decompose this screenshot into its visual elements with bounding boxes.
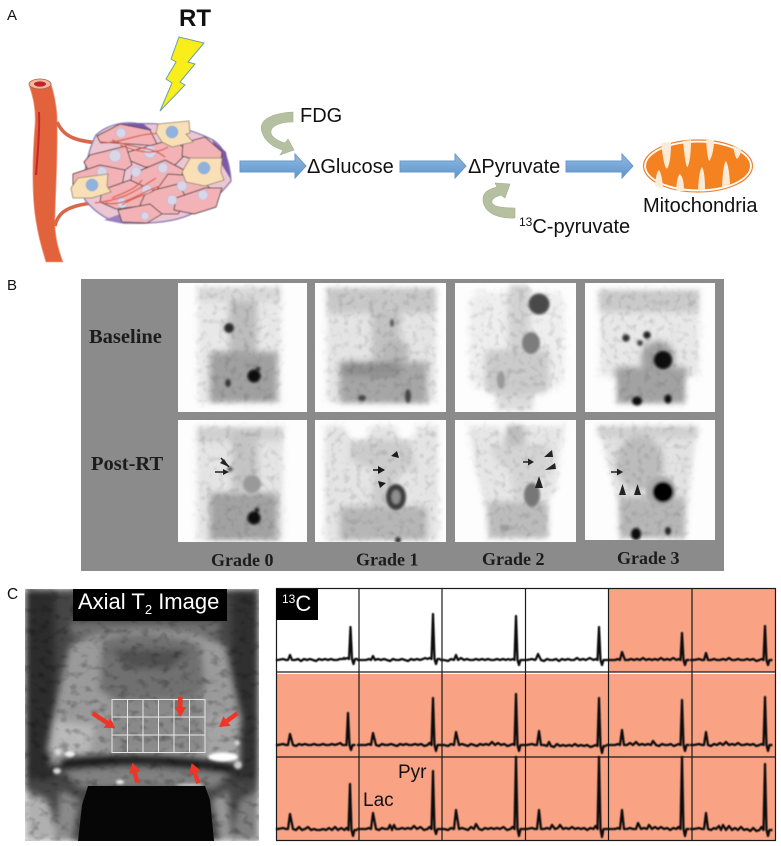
panel A: radiotherapy metabolic pathway	[7, 5, 758, 262]
icon: mitochondrion	[644, 140, 752, 192]
text: 13C-pyruvate: C-pyruvate	[532, 216, 630, 238]
scan: baseline grade 1	[315, 283, 446, 412]
title box: Axial T2 Image	[73, 589, 227, 621]
column label: Grade 0: Grade 0	[211, 550, 274, 570]
text: 13C-pyruvate: 13	[519, 215, 533, 229]
text: delta glucose: ΔGlucose	[307, 156, 394, 178]
row label: Baseline: Baseline	[89, 326, 162, 348]
voxel grid	[112, 700, 205, 752]
scan: baseline grade 0	[178, 283, 307, 412]
red arrows marking tumor	[93, 697, 237, 783]
label box: 13C	[276, 589, 318, 620]
peak label: Lac: Lac	[363, 790, 394, 811]
arrow: glucose to pyruvate	[400, 154, 466, 178]
arrow: tumor to glucose	[240, 154, 306, 178]
spectra: row 1	[276, 614, 772, 665]
title box: Axial T2 Image: Image	[152, 589, 219, 614]
scan: post-RT grade 3	[585, 420, 715, 540]
scan: post-RT grade 0	[178, 420, 307, 542]
rectal air	[78, 786, 214, 841]
text: Mitochondria: Mitochondria	[643, 195, 758, 217]
panel C: axial T2 MRI	[25, 589, 259, 841]
label: A: A	[7, 7, 17, 24]
peak label: Pyr: Pyr	[398, 762, 427, 783]
panel C: 13C spectra grid	[276, 588, 776, 841]
text: FDG: FDG	[300, 105, 342, 127]
icon: tumor cell cluster	[71, 121, 231, 224]
scan: post-RT grade 1	[315, 420, 446, 542]
scan: baseline grade 2	[455, 283, 576, 412]
arrow: pyruvate to mitochondria	[566, 154, 633, 178]
label: C: C	[7, 586, 18, 603]
panel B: PET grid	[81, 279, 724, 571]
title box: Axial T2 Image: Axial T	[78, 589, 145, 614]
arrow: FDG curved uptake	[261, 112, 294, 155]
label box: 13C: 13	[282, 592, 296, 606]
scan: post-RT grade 2	[455, 420, 576, 542]
column label: Grade 1: Grade 1	[356, 550, 418, 570]
column label: Grade 3: Grade 3	[617, 548, 680, 568]
label box: 13C: C	[295, 591, 311, 616]
spectra: row 2	[276, 694, 772, 753]
arrow: 13C-pyruvate curved uptake	[483, 183, 515, 218]
icon: lightning bolt	[160, 37, 204, 111]
text: delta pyruvate: ΔPyruvate	[468, 156, 560, 178]
heading: RT: RT	[179, 5, 211, 32]
icon: blood vessel	[29, 79, 100, 262]
title box: Axial T2 Image: 2	[145, 602, 152, 617]
spectra: row 3	[276, 757, 772, 837]
label: B: B	[7, 277, 17, 294]
column label: Grade 2: Grade 2	[482, 549, 544, 569]
row label: Post-RT: Post-RT	[91, 453, 163, 475]
scan: baseline grade 3	[585, 283, 715, 412]
